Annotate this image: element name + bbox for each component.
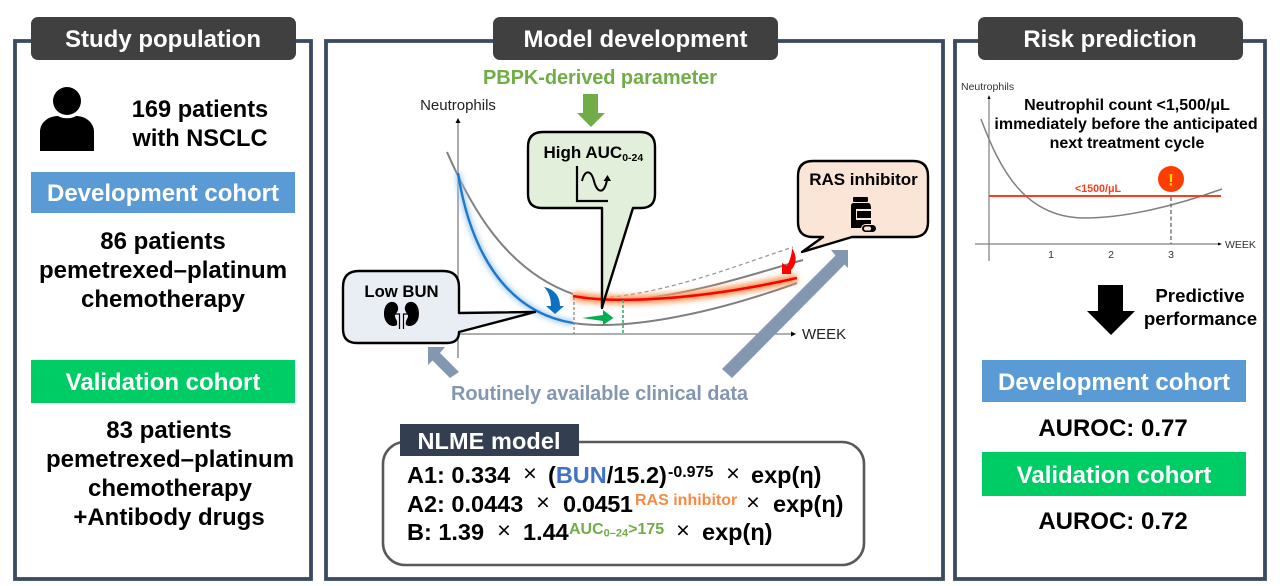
text: outcome definition — [994, 97, 1258, 152]
heading: model development — [493, 17, 778, 60]
label: NLME model: NLME model — [418, 428, 560, 454]
curve: red glow — [573, 278, 797, 300]
callout: high AUC: 0-24 — [622, 152, 643, 164]
text: validation cohort description: pemetrexed–platinum — [46, 446, 294, 473]
text: outcome definition: next treatment cycle — [1050, 135, 1204, 152]
bar: development cohort: Development cohort — [998, 369, 1230, 396]
curve: neutrophil course — [981, 119, 1222, 218]
text: total patients: 169 patients — [132, 97, 268, 123]
text: predictive performance: Predictive — [1155, 285, 1245, 306]
text: development cohort description: 86 patients — [100, 228, 226, 255]
text: validation cohort description: +Antibody drugs — [73, 504, 265, 531]
text: outcome definition: immediately before the anticipated — [994, 116, 1258, 133]
formula: A1: A1: 0.334 — [407, 462, 510, 488]
curve: upper reference — [447, 152, 573, 294]
curve: blue — [458, 173, 573, 323]
axis labels: weeks: 3 — [1168, 249, 1174, 261]
callout: RAS inhibitor: RAS inhibitor — [809, 170, 918, 189]
axis: week — [458, 326, 846, 343]
formula: B: × — [497, 517, 511, 543]
text: development cohort description: pemetrexed–platinum — [39, 257, 287, 284]
axis: neutrophils: Neutrophils — [420, 97, 496, 114]
label: NLME model — [400, 424, 579, 456]
formula: B: B: 1.39 — [407, 519, 484, 545]
axis: week: WEEK — [1225, 239, 1256, 251]
callout: RAS inhibitor — [798, 161, 928, 252]
icon: concentration curve — [577, 166, 611, 201]
callout: high AUC — [528, 132, 655, 308]
label: threshold: <1500/μL — [1075, 183, 1121, 195]
bar: development cohort: Development cohort — [47, 180, 279, 207]
curve: lower — [573, 283, 797, 325]
guide: green dashed — [622, 300, 624, 334]
formula: B: exp(η) — [702, 519, 772, 545]
arrow: clinical data to RAS — [722, 250, 848, 378]
arrow: blue curved — [544, 287, 564, 314]
label: PBPK-derived parameter: PBPK-derived parameter — [483, 67, 717, 89]
box: NLME model — [383, 424, 864, 565]
panel: study population — [15, 17, 311, 579]
text: total patients: with NSCLC — [132, 126, 268, 152]
text: total patients — [132, 97, 268, 152]
axis labels: weeks: 1 — [1048, 249, 1054, 261]
text: outcome definition: Neutrophil count <1,500/μL — [1024, 97, 1230, 114]
formula: B: 1.44 — [523, 519, 569, 545]
formula: A1: × — [523, 460, 537, 486]
text: development cohort description — [39, 228, 287, 313]
icon: medicine bottle — [851, 197, 876, 232]
icon: person — [40, 87, 94, 151]
curve: upper continuation — [640, 260, 803, 299]
axis: neutrophils — [961, 81, 1014, 261]
icon: warning: ! — [1168, 170, 1174, 190]
text: development cohort description: chemotherapy — [81, 286, 246, 313]
panel: model development — [326, 17, 943, 579]
bar: development cohort — [982, 360, 1246, 402]
text: validation cohort description — [46, 417, 294, 531]
callout: low BUN — [343, 271, 535, 343]
bar: validation cohort: Validation cohort — [66, 369, 260, 396]
formula: A2 — [407, 489, 844, 517]
heading: risk prediction: Risk prediction — [1023, 26, 1197, 53]
heading: study population: Study population — [65, 26, 261, 53]
formula: A2: A2: 0.0443 — [407, 491, 523, 517]
arrow: green right — [582, 310, 614, 325]
heading: risk prediction — [978, 17, 1243, 60]
formula: A2: exp(η) — [773, 491, 844, 517]
curve: dashed baseline — [603, 247, 793, 298]
arrow: PBPK down — [577, 94, 605, 127]
formula: A1 — [407, 460, 822, 488]
bar: validation cohort — [982, 452, 1246, 496]
chart: neutropenia threshold — [961, 81, 1256, 261]
text: development AUROC: AUROC: 0.77 — [1038, 415, 1188, 442]
line: threshold — [989, 195, 1221, 197]
bar: validation cohort — [31, 360, 295, 403]
formula: A2: RAS inhibitor — [635, 492, 737, 509]
guide: week 3 — [1170, 197, 1172, 244]
guide: gray dashed — [573, 297, 575, 334]
formula: A2: × — [746, 489, 760, 515]
formula: A1: × — [726, 460, 740, 486]
curve: red — [573, 278, 797, 300]
chart: neutrophil curves — [420, 97, 846, 358]
panel: risk prediction — [955, 17, 1265, 579]
axis labels: weeks: 2 — [1108, 249, 1114, 261]
arrow: to predictive performance — [1087, 285, 1135, 335]
axis: neutrophils — [420, 97, 496, 358]
formula: B: >175 — [628, 521, 664, 538]
axis: week — [975, 239, 1256, 251]
formula: A1: exp(η) — [751, 462, 822, 488]
label: routinely available clinical data: Routinely available clinical data — [451, 383, 749, 405]
formula: B: 0–24 — [604, 528, 629, 540]
heading: model development: Model development — [523, 26, 748, 53]
heading: study population — [31, 17, 296, 60]
formula: B: AUC — [569, 521, 604, 538]
text: predictive performance — [1144, 285, 1257, 329]
text: validation cohort description: chemotherapy — [88, 475, 253, 502]
icon: kidneys — [384, 302, 419, 329]
axis labels: weeks — [1048, 249, 1174, 261]
text: validation cohort description: 83 patients — [106, 417, 232, 444]
axis: week: WEEK — [802, 326, 846, 343]
formula: B — [407, 517, 772, 545]
bar: development cohort — [31, 172, 295, 213]
formula: A2: 0.0451 — [563, 491, 633, 517]
arrow: red curved — [782, 248, 796, 274]
curve: blue glow — [458, 173, 573, 323]
formula: B: × — [676, 517, 690, 543]
bar: validation cohort: Validation cohort — [1017, 462, 1211, 489]
formula: A2: × — [536, 489, 550, 515]
formula: A1: -0.975 — [668, 464, 713, 481]
arrow: clinical data to BUN — [428, 347, 459, 378]
callout: high AUC: High AUC — [544, 143, 622, 162]
formula: A1: (BUN/15.2) — [548, 462, 667, 488]
text: predictive performance: performance — [1144, 308, 1257, 329]
icon: warning — [1158, 166, 1184, 192]
text: validation AUROC: AUROC: 0.72 — [1038, 508, 1188, 535]
axis: neutrophils: Neutrophils — [961, 81, 1014, 93]
callout: low BUN: Low BUN — [364, 282, 439, 301]
